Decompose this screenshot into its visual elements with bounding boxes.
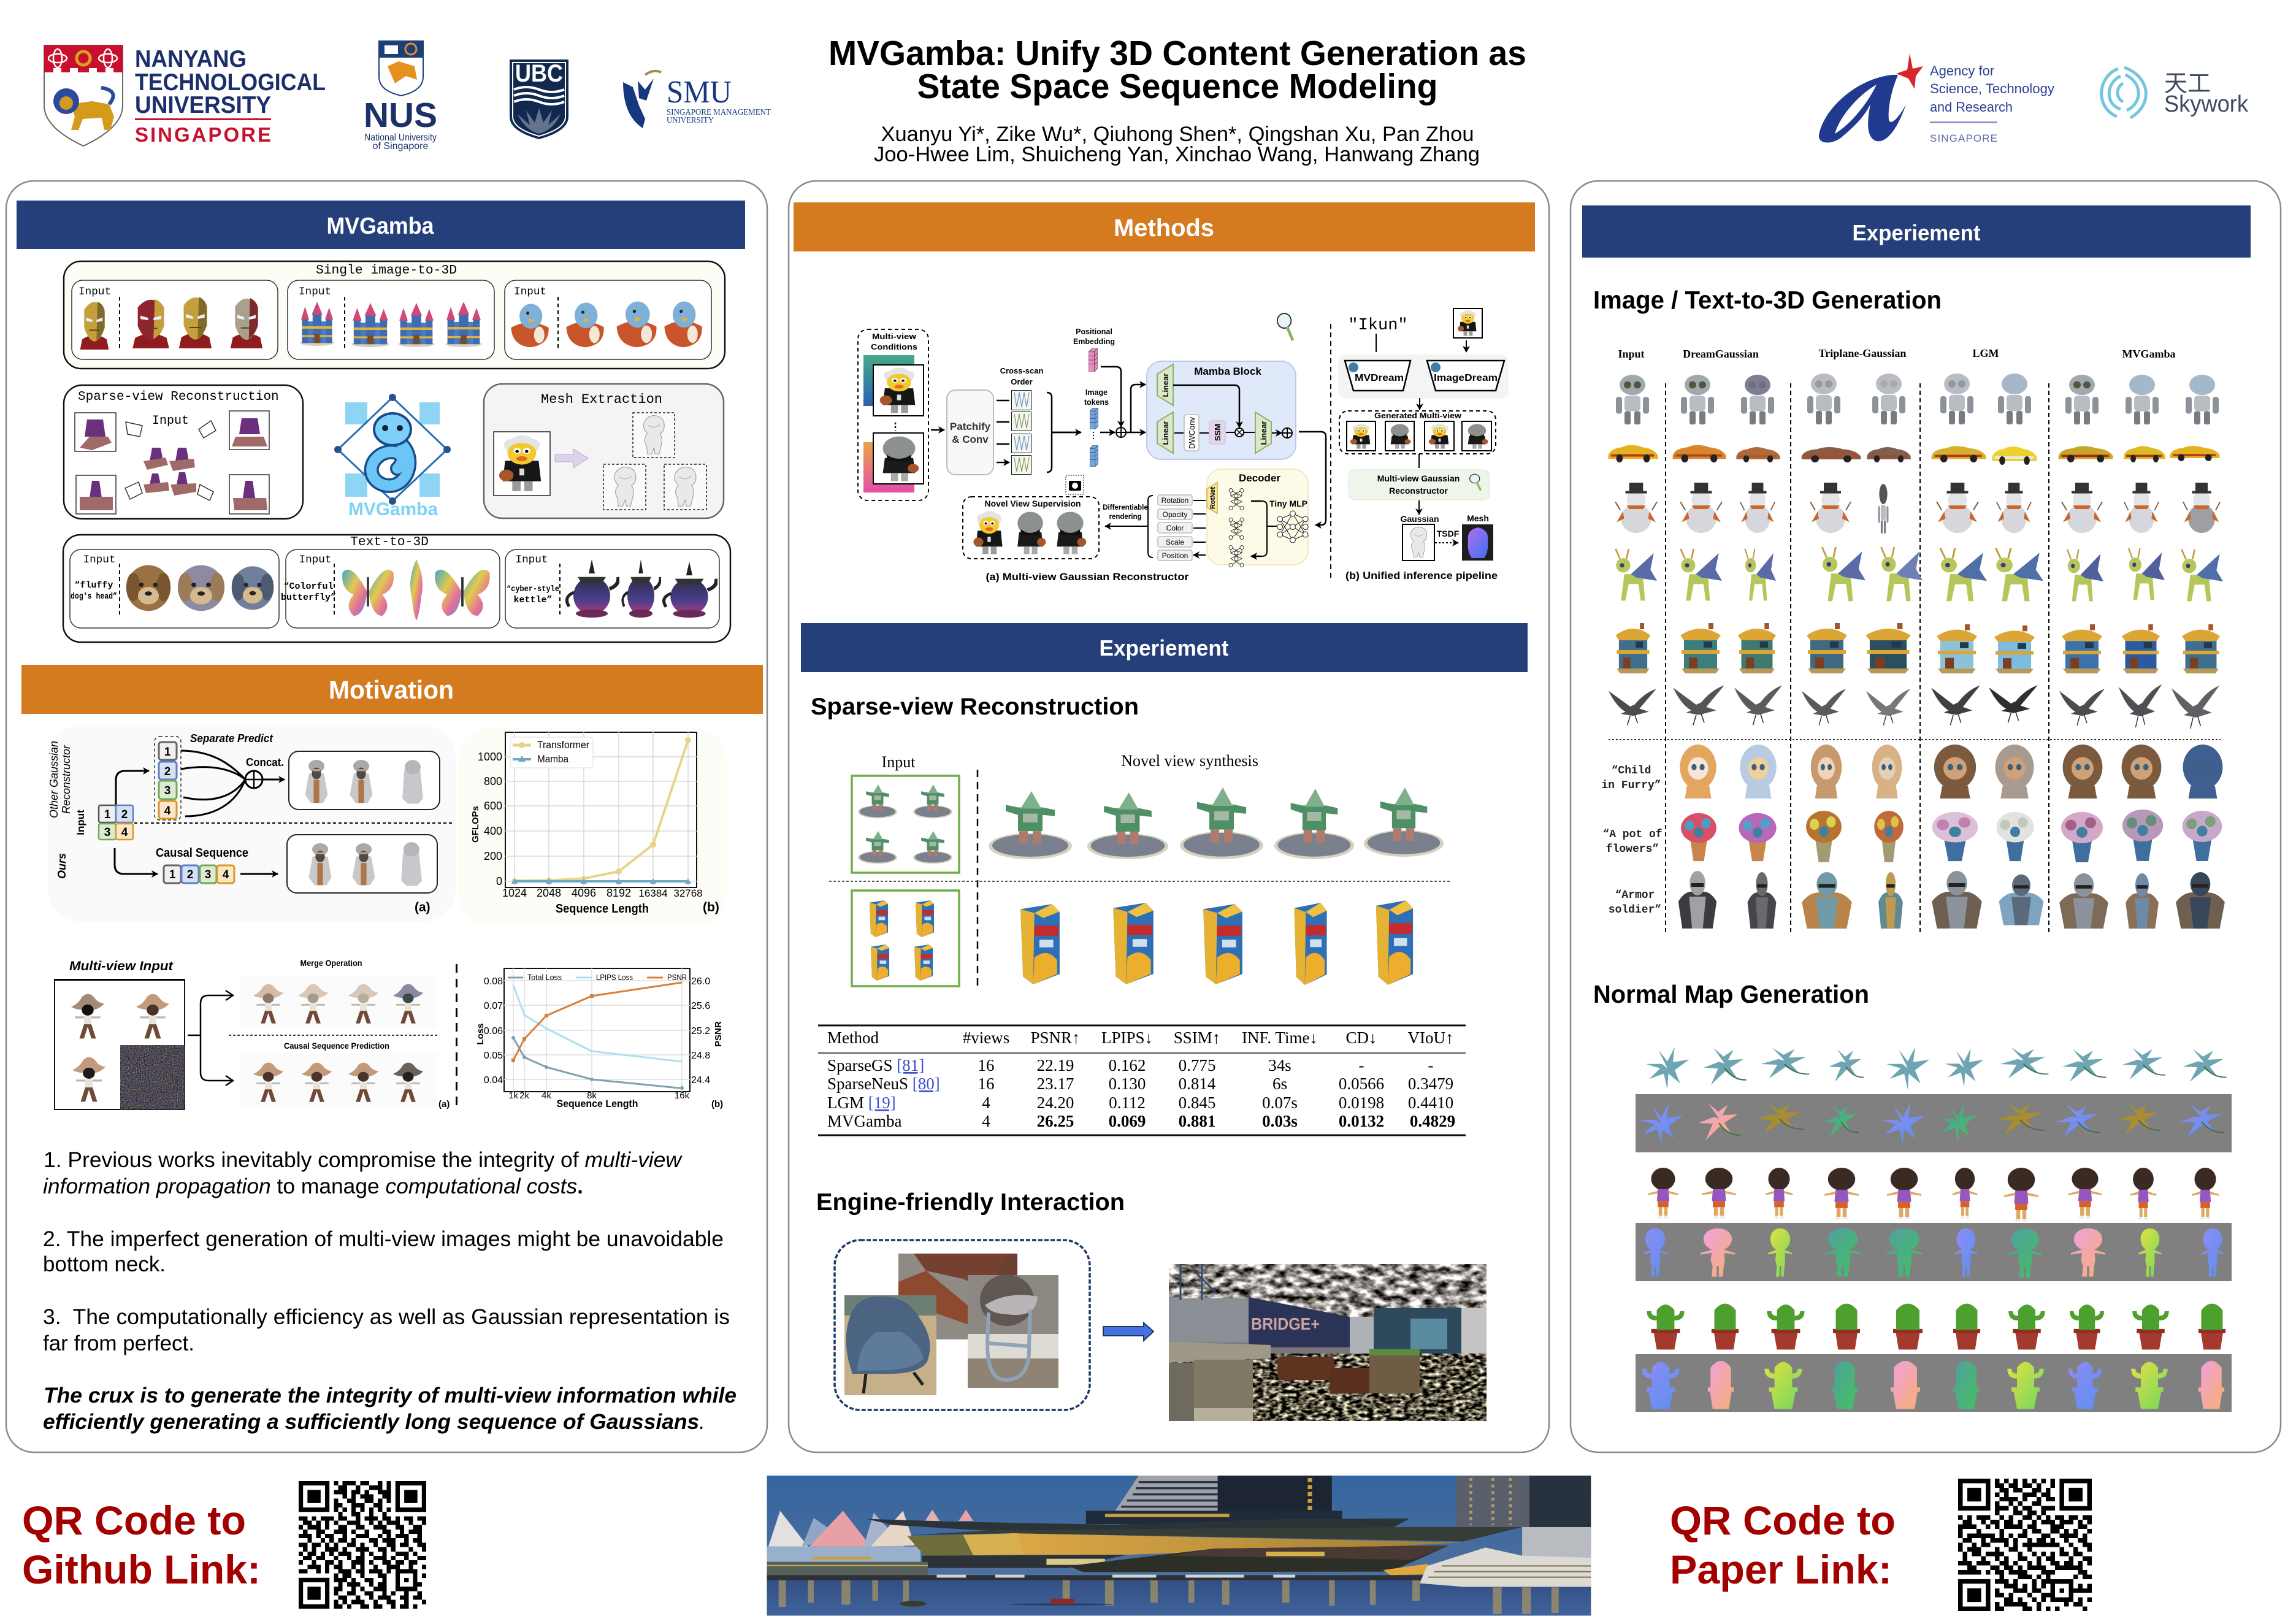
table: quantitative comparison: 0.0198 (1339, 1094, 1384, 1112)
figure: (b) unified inference pipeline: Multi-view Gaussian (1377, 473, 1460, 483)
figure: image and text to 3D comparison grid: Input (1618, 348, 1645, 360)
authors: Xuanyu Yi*, Zike Wu*, Qiuhong Shen*, Qingshan Xu, Pan Zhou (881, 123, 1474, 146)
subheading: Image / Text-to-3D Generation: Image / Text-to-3D Generation (1593, 286, 1942, 314)
figure: separate predict versus causal sequence: Other Gaussian (48, 741, 60, 818)
figure: separate predict versus causal sequence: 3 (164, 784, 170, 797)
group: Text-to-3D: dog's head” (71, 592, 117, 602)
chart: loss and PSNR versus sequence length: (b) (711, 1099, 723, 1109)
figure: image and text to 3D comparison grid: MVGamba (2122, 348, 2176, 360)
chart: loss and PSNR versus sequence length: 1k (508, 1090, 518, 1101)
group: Sparse-view Reconstruction: Input (152, 414, 189, 428)
text block: motivation points: bottom neck. (43, 1252, 166, 1276)
table: quantitative comparison: - (1428, 1056, 1434, 1074)
figure: (a) multi-view Gaussian reconstructor: Positional (1076, 327, 1112, 336)
figure: (a) multi-view Gaussian reconstructor: Tiny MLP (1269, 499, 1307, 508)
heading bar: Methods (794, 202, 1535, 251)
logo: Tiangong Skywork: 天工 (2164, 71, 2211, 97)
figure: image and text to 3D comparison grid: DreamGaussian (1683, 348, 1759, 360)
chart: GFLOPs versus sequence length: 400 (484, 825, 502, 837)
chart: loss and PSNR versus sequence length: 8k (587, 1090, 597, 1101)
heading bar: Motivation (21, 665, 763, 714)
figure: separate predict versus causal sequence: 1 (169, 868, 176, 881)
figure: separate predict versus causal sequence: Ours (56, 853, 68, 879)
figure: (a) multi-view Gaussian reconstructor: Linear (1161, 373, 1170, 397)
figure: (b) unified inference pipeline: "Ikun" (1348, 316, 1408, 335)
text block: motivation points: 1. Previous works inevitably compromise the integrity of multi-view (44, 1147, 683, 1172)
heading bar: Methods: Methods (1114, 215, 1214, 242)
table: quantitative comparison: 23.17 (1037, 1074, 1074, 1093)
group: Single image-to-3D: Input (514, 286, 546, 298)
row: snowman (1615, 483, 2220, 534)
table: quantitative comparison: 0.845 (1179, 1094, 1215, 1112)
group: Sparse-view Reconstruction (64, 385, 303, 519)
logo: Nanyang Technological University: UNIVERSITY (135, 92, 271, 118)
table: quantitative comparison: 0.07s (1262, 1094, 1298, 1112)
chart: loss and PSNR versus sequence length: 2k (519, 1090, 529, 1101)
chart: loss and PSNR versus sequence length: 0.05 (484, 1051, 503, 1061)
row: house (1616, 623, 2220, 673)
figure: (a) multi-view Gaussian reconstructor: Cross-scan (1000, 366, 1043, 375)
text prompt: A pot of flowers: “A pot of (1602, 829, 1663, 841)
logo: Tiangong Skywork (2102, 67, 2249, 118)
table: quantitative comparison: 0.0132 (1339, 1112, 1384, 1130)
figure: image and text to 3D comparison grid: LGM (1972, 347, 1999, 359)
heading bar: Motivation: Motivation (329, 675, 454, 704)
figure: separate predict versus causal sequence: 1 (164, 746, 171, 759)
logo: Tiangong Skywork: Skywork (2164, 91, 2249, 117)
figure: separate predict versus causal sequence: Causal Sequence (156, 846, 248, 860)
group: Single image-to-3D (64, 261, 725, 369)
chart: loss and PSNR versus sequence length: 24.8 (691, 1051, 710, 1061)
chart: loss and PSNR versus sequence length: 0.07 (484, 1001, 503, 1011)
chart: GFLOPs versus sequence length: 16384 (638, 887, 668, 899)
chart: GFLOPs versus sequence length: 200 (484, 850, 502, 862)
figure: (a) multi-view Gaussian reconstructor: Mamba Block (1194, 366, 1261, 377)
row: dragon (1615, 547, 2223, 601)
chart: loss and PSNR versus sequence length: 0.06 (484, 1026, 503, 1036)
chart: GFLOPs versus sequence length: Mamba (537, 753, 568, 765)
group: Text-to-3D: “cyber-style (507, 584, 559, 594)
figure: separate predict versus causal sequence (48, 724, 456, 922)
group: Single image-to-3D: Input (78, 286, 111, 298)
table: quantitative comparison: #views (963, 1028, 1009, 1047)
figure: separate predict versus causal sequence: (a) (415, 900, 431, 914)
title: State Space Sequence Modeling (917, 67, 1437, 106)
authors: Joo-Hwee Lim, Shuicheng Yan, Xinchao Wang, Hanwang Zhang (874, 143, 1480, 166)
label: QR code to Github link (22, 1498, 261, 1592)
group: Text-to-3D: Input (515, 554, 548, 566)
logo: National University of Singapore: NUS (364, 96, 437, 135)
chart: GFLOPs versus sequence length: 4096 (572, 887, 596, 899)
table: quantitative comparison: 0.130 (1109, 1074, 1146, 1093)
panel: middle column (789, 181, 1549, 1452)
table: quantitative comparison: 34s (1268, 1056, 1292, 1074)
chart: GFLOPs versus sequence length: 800 (484, 775, 502, 787)
table: quantitative comparison: 0.4829 (1410, 1112, 1455, 1130)
logo: A*STAR (1819, 53, 2054, 144)
logo: University of British Columbia: UBC (515, 60, 563, 87)
chart: GFLOPs versus sequence length: 0 (496, 875, 502, 887)
chart: loss and PSNR versus sequence length: 0.04 (484, 1075, 503, 1086)
figure: (a) multi-view Gaussian reconstructor: DWConv (1187, 417, 1196, 449)
heading bar: MVGamba (17, 201, 745, 249)
chart: loss and PSNR versus sequence length: 16k (675, 1090, 690, 1101)
table: quantitative comparison: 16 (978, 1074, 995, 1093)
QR code: paper (1958, 1479, 2092, 1611)
group: Text-to-3D: “Colorful (283, 581, 334, 592)
table: quantitative comparison: 0.814 (1179, 1074, 1216, 1093)
figure: (a) multi-view Gaussian reconstructor (858, 327, 1326, 583)
table: quantitative comparison: VIoU↑ (1408, 1028, 1453, 1047)
chart: loss and PSNR versus sequence length: PSNR (713, 1021, 724, 1047)
logo: Singapore Management University: UNIVERSITY (667, 116, 714, 125)
chart: loss and PSNR versus sequence length: 25.6 (691, 1001, 710, 1011)
figure: merge operation versus causal prediction: Causal Sequence Prediction (284, 1041, 389, 1051)
figure: (a) multi-view Gaussian reconstructor: Differentiable (1103, 504, 1148, 511)
row: cactus normals (1642, 1361, 2224, 1409)
table: quantitative comparison: 0.775 (1179, 1056, 1215, 1074)
figure: (b) unified inference pipeline: MVDream (1355, 373, 1404, 383)
panel: right column (1571, 181, 2281, 1452)
figure: (b) unified inference pipeline (1331, 308, 1509, 581)
figure: (a) multi-view Gaussian reconstructor: Decoder (1239, 472, 1280, 484)
group: Sparse-view Reconstruction: Sparse-view Reconstruction (78, 390, 279, 404)
table: quantitative comparison: LPIPS↓ (1101, 1028, 1153, 1047)
chart: GFLOPs versus sequence length: GFLOPs (470, 806, 481, 843)
logo: Nanyang Technological University (44, 45, 326, 146)
text prompt: Armor soldier: soldier” (1609, 904, 1661, 916)
chart: loss and PSNR versus sequence length: 24.4 (691, 1075, 710, 1086)
figure: separate predict versus causal sequence: 3 (205, 868, 211, 881)
figure: reconstructed scene with inserted furniture: BRIDGE+ (1251, 1314, 1320, 1333)
text prompt: A pot of flowers: flowers” (1606, 843, 1659, 856)
figure: (b) unified inference pipeline: Mesh (1467, 513, 1489, 523)
figure: separate predict versus causal sequence: 2 (121, 808, 128, 821)
row: dora normals (1643, 1228, 2224, 1278)
figure: separate predict versus causal sequence: Reconstructor (60, 745, 72, 814)
text prompt: Child in Furry: in Furry” (1601, 779, 1661, 792)
logo: A*STAR: Science, Technology (1930, 81, 2054, 96)
chart: loss and PSNR versus sequence length: Total Loss (527, 973, 562, 982)
text prompt: Armor soldier: “Armor (1615, 889, 1655, 902)
chart: loss and PSNR versus sequence length (475, 968, 724, 1109)
group: Mesh Extraction: Mesh Extraction (541, 392, 662, 407)
row: robot (1616, 373, 2219, 424)
logo: A*STAR: SINGAPORE (1930, 132, 1997, 144)
figure: (a) multi-view Gaussian reconstructor: Novel View Supervision (985, 499, 1081, 508)
logo: Singapore Management University: SMU (667, 75, 732, 110)
figure: (b) unified inference pipeline: Gaussian (1400, 514, 1439, 524)
figure: (b) unified inference pipeline: (b) Unified inference pipeline (1345, 570, 1498, 581)
group: Text-to-3D: butterfly” (281, 592, 336, 603)
heading bar: Experiement: Experiement (1099, 635, 1229, 661)
group: Text-to-3D: “fluffy (74, 580, 113, 591)
text block: motivation points (43, 1147, 737, 1434)
figure: (b) unified inference pipeline: TSDF (1437, 529, 1460, 538)
figure: (a) multi-view Gaussian reconstructor: Image (1085, 388, 1108, 397)
text block: motivation points: information propagation to manage computational costs. (43, 1174, 583, 1198)
row: cactus RGB (1647, 1304, 2225, 1349)
table: quantitative comparison: 0.162 (1109, 1056, 1146, 1074)
table: quantitative comparison: 0.3479 (1408, 1074, 1453, 1093)
group: Text-to-3D (63, 535, 730, 642)
chart: GFLOPs versus sequence length: 1000 (478, 751, 502, 763)
photo: Vancouver convention centre at dusk (767, 1476, 1591, 1615)
arrow: assets to scene (1103, 1323, 1154, 1341)
chart: GFLOPs versus sequence length: 32768 (673, 887, 703, 899)
heading bar: Experiement (801, 623, 1528, 672)
logo: University of British Columbia (510, 59, 568, 139)
logo: A*STAR: Agency for (1930, 63, 1994, 79)
title: MVGamba: Unify 3D Content Generation as (828, 34, 1526, 73)
row: crow (1609, 684, 2219, 729)
table: quantitative comparison: - (1359, 1056, 1364, 1074)
row: car (1609, 445, 2219, 465)
table: quantitative comparison: INF. Time↓ (1242, 1028, 1318, 1047)
text prompt: A pot of flowers (1602, 829, 1663, 856)
figure: merge operation versus causal prediction: Multi-view Input (69, 959, 174, 973)
text prompt: Child in Furry: “Child (1612, 765, 1651, 777)
table: quantitative comparison: PSNR↑ (1030, 1028, 1081, 1047)
chart: GFLOPs versus sequence length: 8192 (607, 887, 631, 899)
chart: GFLOPs versus sequence length (458, 728, 727, 925)
row: armor (1678, 871, 2225, 929)
chart: GFLOPs versus sequence length: Transformer (537, 739, 589, 751)
chart: GFLOPs versus sequence length: 600 (484, 800, 502, 812)
figure: separate predict versus causal sequence: 4 (164, 805, 171, 818)
chart: loss and PSNR versus sequence length: 0.08 (484, 976, 503, 987)
chart: loss and PSNR versus sequence length: LPIPS Loss (596, 973, 633, 982)
logo: Singapore Management University (623, 71, 771, 128)
figure: (a) multi-view Gaussian reconstructor: tokens (1084, 398, 1109, 407)
logo: National University of Singapore (364, 41, 437, 151)
figure: separate predict versus causal sequence: 1 (104, 808, 111, 821)
text block: motivation points: The crux is to generate the integrity of multi-view information while (44, 1383, 737, 1408)
group: Text-to-3D: Input (83, 554, 116, 566)
heading bar: Experiement: Experiement (1852, 220, 1981, 245)
chart: loss and PSNR versus sequence length: 26.0 (691, 976, 710, 987)
figure: (a) multi-view Gaussian reconstructor: Position (1162, 551, 1188, 560)
text prompt: Armor soldier (1609, 889, 1661, 916)
text block: motivation points: far from perfect. (43, 1331, 194, 1355)
text block: motivation points: 2. The imperfect generation of multi-view images might be unavoidable (43, 1227, 724, 1251)
chart: loss and PSNR versus sequence length: 25.2 (691, 1026, 710, 1036)
figure: image and text to 3D comparison grid (1601, 347, 2225, 932)
figure: (a) multi-view Gaussian reconstructor: rendering (1109, 513, 1142, 521)
figure: (a) multi-view Gaussian reconstructor: RotNet (1209, 487, 1217, 509)
subheading: Normal Map Generation: Normal Map Generation (1593, 980, 1869, 1008)
label: QR code to Github link: QR Code to (22, 1498, 246, 1543)
label: QR code to paper link: Paper Link: (1670, 1547, 1892, 1592)
figure: (a) multi-view Gaussian reconstructor: Multi-view (872, 332, 917, 341)
figure: (a) multi-view Gaussian reconstructor: (a) Multi-view Gaussian Reconstructor (986, 571, 1189, 583)
table: quantitative comparison: 22.19 (1037, 1056, 1074, 1074)
table: quantitative comparison: CD↓ (1345, 1028, 1377, 1047)
group: Single image-to-3D: Single image-to-3D (316, 263, 457, 278)
table: quantitative comparison: 0.4410 (1408, 1094, 1453, 1112)
table: quantitative comparison: 26.25 (1037, 1112, 1074, 1130)
figure: separate predict versus causal sequence: Concat. (246, 756, 284, 768)
panel: left column (6, 181, 767, 1452)
authors (874, 123, 1480, 166)
logo: MVGamba snake (334, 394, 451, 519)
QR code: Github (299, 1481, 426, 1609)
table: quantitative comparison: 0.03s (1262, 1112, 1298, 1130)
figure: merge operation versus causal prediction: (a) (438, 1099, 450, 1109)
icon: magnifier (1277, 313, 1293, 340)
table: quantitative comparison: LGM [19] (827, 1094, 896, 1112)
figure: sparse-view novel view synthesis (829, 752, 1450, 987)
figure: separate predict versus causal sequence: 3 (104, 826, 110, 839)
text block: motivation points: 3. The computationally efficiency as well as Gaussian representation is (43, 1304, 730, 1329)
figure: (a) multi-view Gaussian reconstructor: Patchify (950, 421, 991, 432)
table: quantitative comparison: SparseNeuS [80] (827, 1074, 940, 1093)
label: QR code to paper link (1670, 1498, 1896, 1592)
text block: motivation points: efficiently generating a sufficiently long sequence of Gaussians. (43, 1409, 705, 1434)
logo: Nanyang Technological University: SINGAPORE (135, 123, 271, 146)
figure: separate predict versus causal sequence: 2 (164, 765, 170, 778)
group: Mesh Extraction (484, 384, 724, 518)
table: quantitative comparison: 24.20 (1037, 1094, 1074, 1112)
title (828, 34, 1526, 106)
figure: (a) multi-view Gaussian reconstructor: Linear (1161, 421, 1170, 445)
label: QR code to paper link: QR Code to (1670, 1498, 1896, 1543)
chart: loss and PSNR versus sequence length: Sequence Length (557, 1098, 638, 1109)
row: lily normals (1639, 1103, 2224, 1145)
figure: separate predict versus causal sequence: 4 (223, 868, 229, 881)
table: quantitative comparison: SparseGS [81] (827, 1056, 924, 1074)
chart: loss and PSNR versus sequence length: 4k (541, 1090, 551, 1101)
figure: reconstructed scene with inserted furniture (1169, 1264, 1487, 1421)
table: quantitative comparison: Method (827, 1028, 879, 1047)
chart: GFLOPs versus sequence length: 2048 (537, 887, 561, 899)
chart: GFLOPs versus sequence length: 1024 (502, 887, 527, 899)
group: Single image-to-3D: Input (299, 286, 331, 298)
row: dora RGB (1648, 1168, 2219, 1222)
logo: Nanyang Technological University: TECHNOLOGICAL (135, 69, 326, 96)
figure: separate predict versus causal sequence: Input (75, 810, 86, 835)
figure: (a) multi-view Gaussian reconstructor: Embedding (1073, 337, 1115, 346)
group: Text-to-3D: Text-to-3D (350, 535, 429, 550)
table: quantitative comparison: 0.881 (1179, 1112, 1215, 1130)
table: quantitative comparison: 4 (982, 1112, 990, 1130)
table: quantitative comparison: 0.112 (1109, 1094, 1146, 1112)
figure: (a) multi-view Gaussian reconstructor: Conditions (871, 342, 917, 351)
logo: National University of Singapore: National University (364, 132, 437, 143)
figure: separate predict versus causal sequence: 2 (187, 868, 193, 881)
subheading: Engine-friendly Interaction: Engine-friendly Interaction (816, 1189, 1125, 1216)
table: quantitative comparison: 0.0566 (1339, 1074, 1384, 1093)
table: quantitative comparison: 0.069 (1109, 1112, 1146, 1130)
figure: (a) multi-view Gaussian reconstructor: SSM (1213, 424, 1222, 441)
figure: (b) unified inference pipeline: Reconstructor (1389, 486, 1448, 496)
figure: (a) multi-view Gaussian reconstructor: Scale (1166, 538, 1184, 546)
figure: (a) multi-view Gaussian reconstructor: Color (1166, 524, 1184, 532)
figure: sparse-view novel view synthesis: Input (882, 753, 916, 771)
subheading: Sparse-view Reconstruction: Sparse-view Reconstruction (811, 694, 1139, 720)
logo: Singapore Management University: SINGAPORE MANAGEMENT (667, 108, 771, 117)
figure: furniture input assets (835, 1240, 1090, 1410)
figure: (b) unified inference pipeline: ImageDream (1434, 373, 1498, 383)
row: child in fur (1680, 745, 2222, 799)
table: quantitative comparison: SSIM↑ (1174, 1028, 1220, 1047)
table: quantitative comparison: MVGamba (827, 1112, 901, 1130)
figure: (a) multi-view Gaussian reconstructor: Rotation (1161, 496, 1188, 505)
table: quantitative comparison (818, 1025, 1466, 1135)
logo: National University of Singapore: of Singapore (373, 141, 428, 151)
figure: (a) multi-view Gaussian reconstructor: Opacity (1163, 510, 1187, 519)
group: Text-to-3D: Input (299, 554, 332, 566)
figure: (a) multi-view Gaussian reconstructor: Order (1011, 377, 1033, 386)
row: flowers (1681, 810, 2222, 862)
heading bar: MVGamba: MVGamba (326, 213, 434, 239)
logo: A*STAR: and Research (1930, 99, 2013, 115)
table: quantitative comparison: 4 (982, 1094, 990, 1112)
figure: (a) multi-view Gaussian reconstructor: & Conv (952, 434, 989, 445)
chart: loss and PSNR versus sequence length: PSNR (667, 973, 687, 982)
heading bar: Experiement (1582, 205, 2251, 258)
label: QR code to Github link: Github Link: (22, 1547, 261, 1592)
figure: (b) unified inference pipeline: Generated Multi-view (1374, 411, 1462, 420)
figure: image and text to 3D comparison grid: Triplane-Gaussian (1819, 347, 1906, 359)
figure: (a) multi-view Gaussian reconstructor: Linear (1259, 421, 1268, 445)
logo: MVGamba snake: MVGamba (348, 499, 438, 519)
figure: separate predict versus causal sequence: 4 (121, 826, 128, 839)
chart: loss and PSNR versus sequence length: Loss (475, 1023, 486, 1045)
chart: GFLOPs versus sequence length: (b) (703, 900, 719, 914)
table: quantitative comparison: 16 (978, 1056, 995, 1074)
figure: normal map generation strips (1636, 1047, 2232, 1412)
group: Text-to-3D: kettle” (513, 595, 553, 605)
figure: merge operation versus causal prediction: Merge Operation (300, 958, 362, 968)
logo: Nanyang Technological University: NANYANG (135, 46, 247, 72)
figure: sparse-view novel view synthesis: Novel view synthesis (1121, 752, 1258, 770)
chart: GFLOPs versus sequence length: Sequence Length (556, 902, 649, 916)
table: quantitative comparison: 6s (1272, 1074, 1287, 1093)
text prompt: Child in Furry (1601, 765, 1661, 792)
figure: merge operation versus causal prediction (55, 958, 456, 1109)
figure: separate predict versus causal sequence: Separate Predict (190, 732, 274, 745)
row: lily RGB (1645, 1047, 2226, 1090)
